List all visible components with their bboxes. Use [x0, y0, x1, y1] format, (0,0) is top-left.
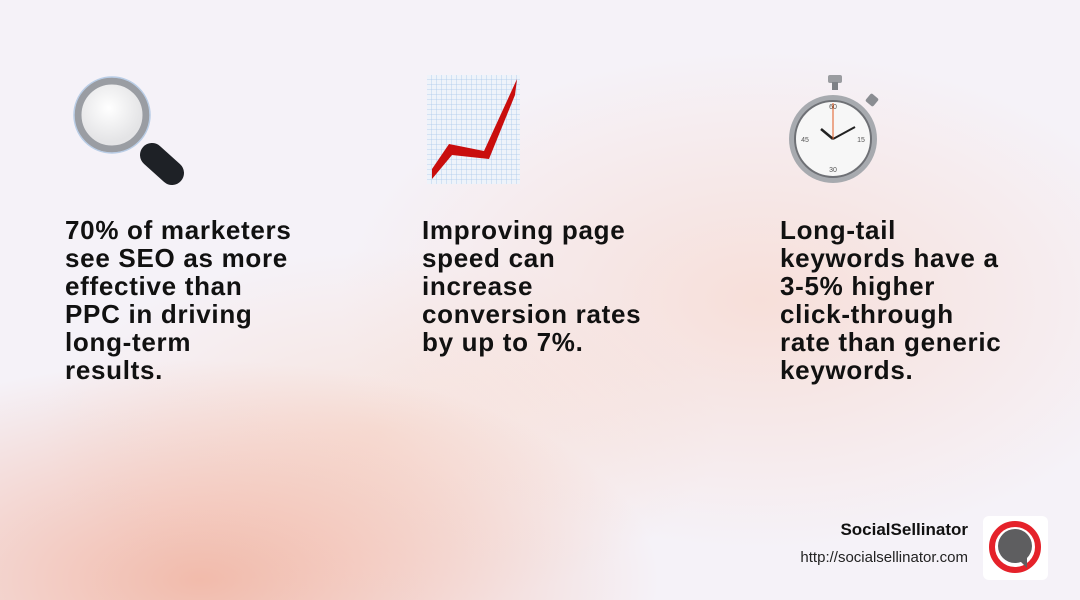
text: stat 3: keywords.	[780, 355, 913, 385]
logo	[983, 516, 1048, 580]
text: stat 3: Long-tail	[780, 215, 896, 245]
text: stat 3: 3-5% higher	[780, 271, 935, 301]
text: stat 1: results.	[65, 355, 163, 385]
text: stat 1: PPC in driving	[65, 299, 252, 329]
icon: rising chart	[427, 75, 520, 184]
text: stat 3	[780, 215, 1001, 385]
icon: stopwatch: 30	[829, 167, 837, 174]
text: stat 3: keywords have a	[780, 243, 999, 273]
brand name: SocialSellinator	[840, 520, 968, 539]
text: stat 2	[422, 215, 641, 357]
text: stat 2: Improving page	[422, 215, 625, 245]
brand url: http://socialsellinator.com	[800, 549, 968, 566]
text: stat 2: by up to 7%.	[422, 327, 584, 357]
text: stat 1: see SEO as more	[65, 243, 288, 273]
icon: stopwatch	[789, 75, 878, 183]
text: stat 3: rate than generic	[780, 327, 1001, 357]
text: stat 2: speed can	[422, 243, 555, 273]
text: stat 2: conversion rates	[422, 299, 641, 329]
text: stat 1: long-term	[65, 327, 191, 357]
text: stat 1	[65, 215, 292, 385]
text: stat 3: click-through	[780, 299, 954, 329]
text: stat 1: effective than	[65, 271, 242, 301]
icon: stopwatch: 15	[857, 137, 865, 144]
icon: magnifying glass	[73, 76, 184, 185]
text: stat 1: 70% of marketers	[65, 215, 292, 245]
text: stat 2: increase	[422, 271, 533, 301]
icon: stopwatch: 60	[829, 104, 837, 111]
icon: stopwatch: 45	[801, 137, 809, 144]
